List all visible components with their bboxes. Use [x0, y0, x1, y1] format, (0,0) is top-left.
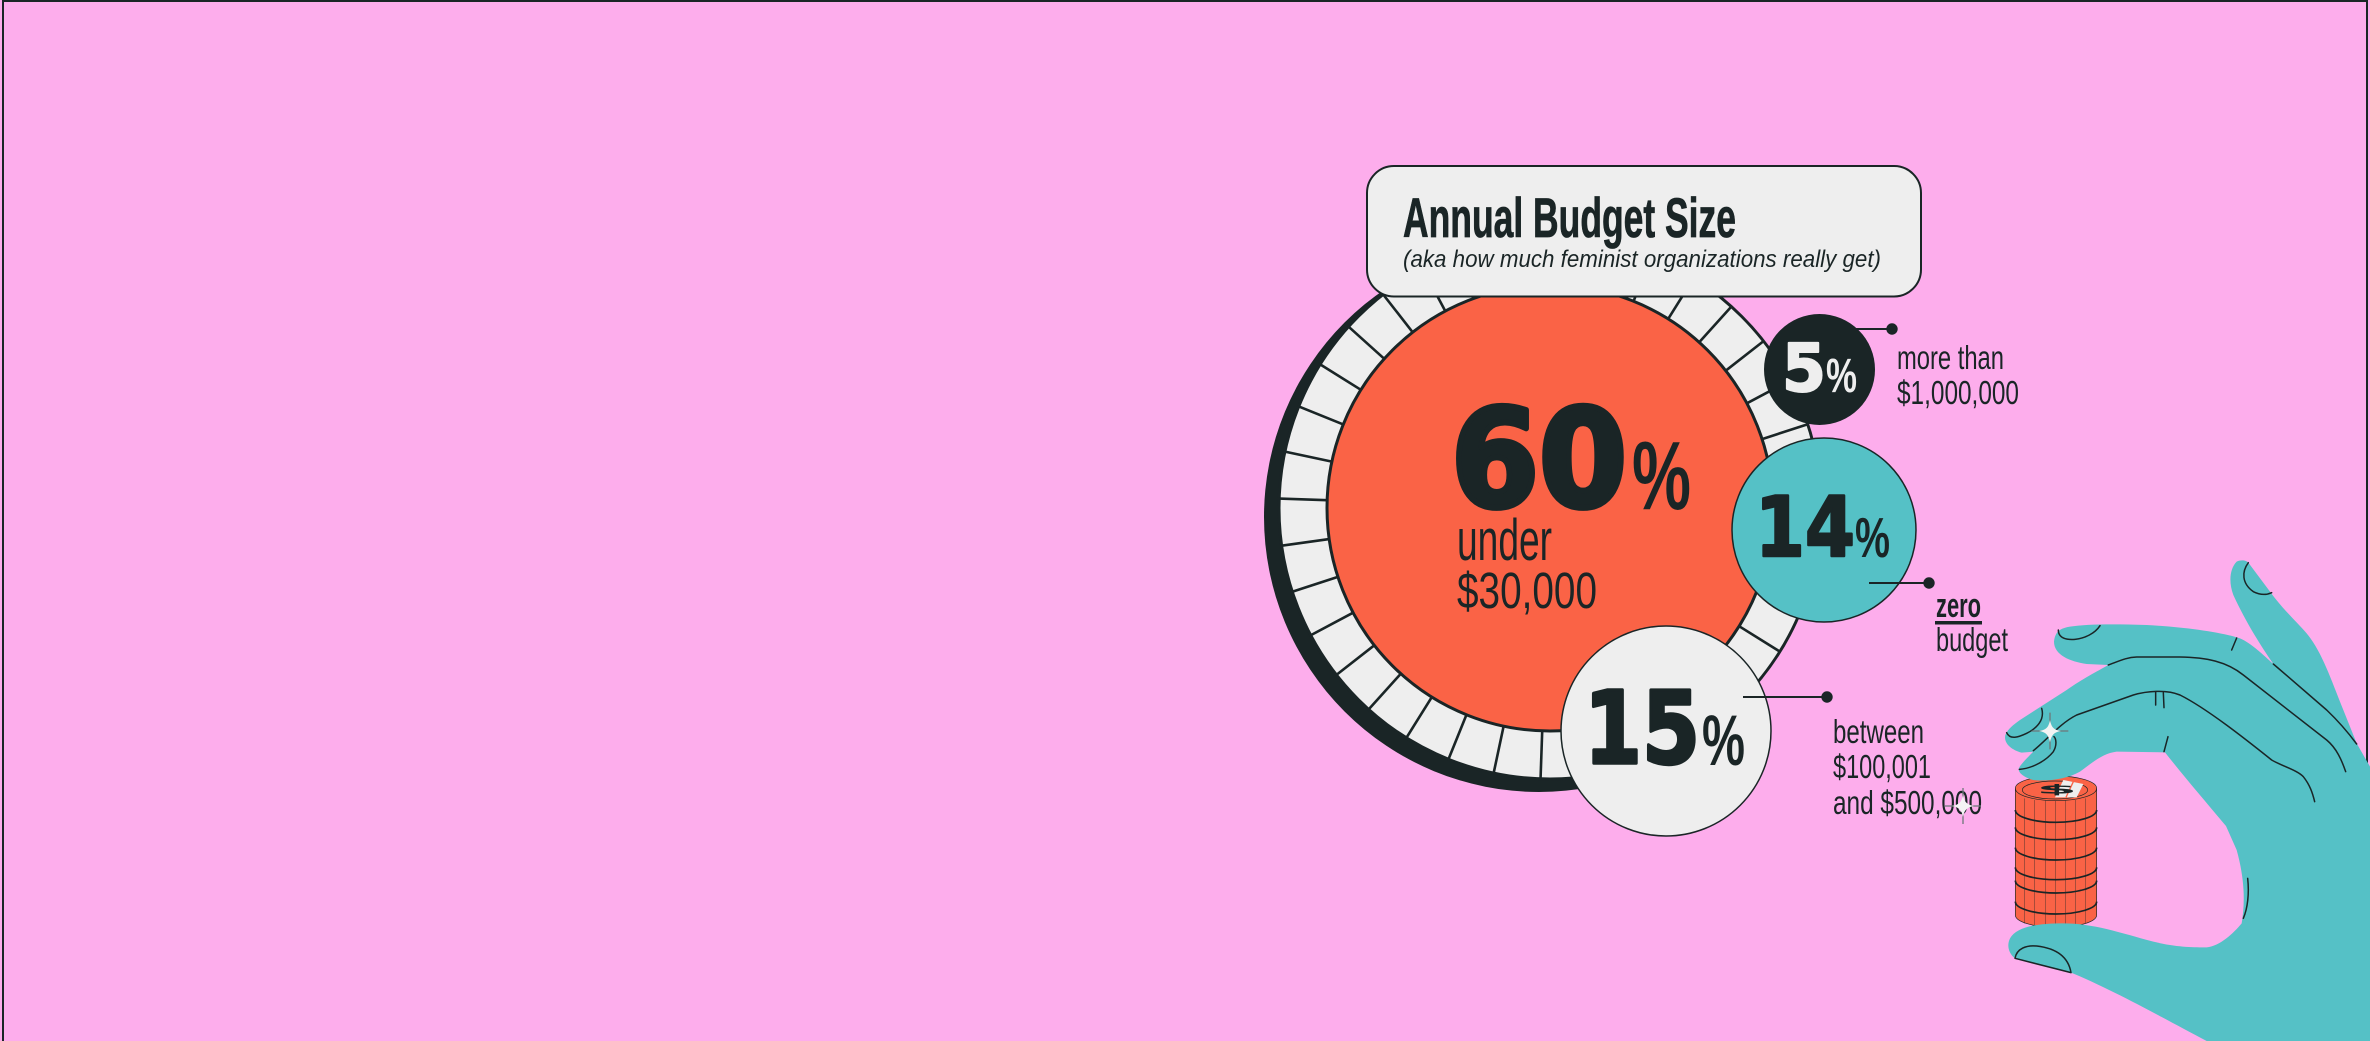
bubble: 14 percent	[1732, 438, 1916, 622]
sparkle on fingers	[2032, 713, 2068, 749]
bubble: 14 percent: %	[1855, 506, 1890, 570]
label: zero budget	[1935, 587, 2008, 658]
illustration: hand holding coins	[2005, 560, 2370, 1041]
label: between $100,001 and $500,000: $100,001	[1833, 748, 1931, 785]
title card	[1367, 166, 1921, 296]
connector: 14 percent	[1869, 577, 1935, 589]
title: Annual Budget Size	[1403, 186, 1736, 249]
60% figure: %	[1632, 421, 1691, 530]
bubble: 15 percent: 15	[1584, 670, 1700, 787]
bubble: 15 percent	[1561, 626, 1771, 836]
sparkle on label	[1945, 788, 1981, 824]
subtitle: (aka how much feminist organizations really get)	[1403, 246, 1881, 273]
label: under $30,000	[1457, 508, 1597, 619]
label: more than $1,000,000: $1,000,000	[1897, 374, 2019, 411]
bubble: 5 percent: 5	[1782, 330, 1826, 407]
donut chart: annual budget size	[1264, 237, 1821, 792]
bubble: 5 percent: %	[1826, 350, 1857, 403]
bubble: 5 percent	[1764, 314, 1875, 425]
connector: 15 percent	[1743, 691, 1833, 703]
label: between $100,001 and $500,000: and $500,000	[1833, 784, 1982, 821]
bubble: 15 percent: %	[1702, 702, 1745, 781]
label: more than $1,000,000: more than	[1897, 339, 2004, 376]
label: between $100,001 and $500,000	[1833, 713, 1982, 821]
label: under $30,000: under	[1457, 508, 1552, 573]
hand	[2005, 560, 2370, 1041]
label: between $100,001 and $500,000: between	[1833, 713, 1924, 750]
label: zero budget: budget	[1936, 621, 2008, 658]
chart shadow crescent	[1264, 242, 1814, 792]
hand line details	[2007, 563, 2357, 973]
60% figure: 60	[1451, 381, 1627, 538]
segmented ring	[1279, 237, 1821, 779]
label: more than $1,000,000	[1897, 339, 2019, 411]
label: under $30,000: $30,000	[1457, 562, 1597, 619]
bubble: 14 percent: 14	[1755, 479, 1855, 576]
60 percent orange circle	[1327, 285, 1773, 731]
coin stack: $	[2037, 782, 2077, 796]
coin stack	[2015, 776, 2097, 927]
label: zero budget: zero	[1936, 587, 1981, 625]
connector: 5 percent	[1855, 323, 1898, 335]
